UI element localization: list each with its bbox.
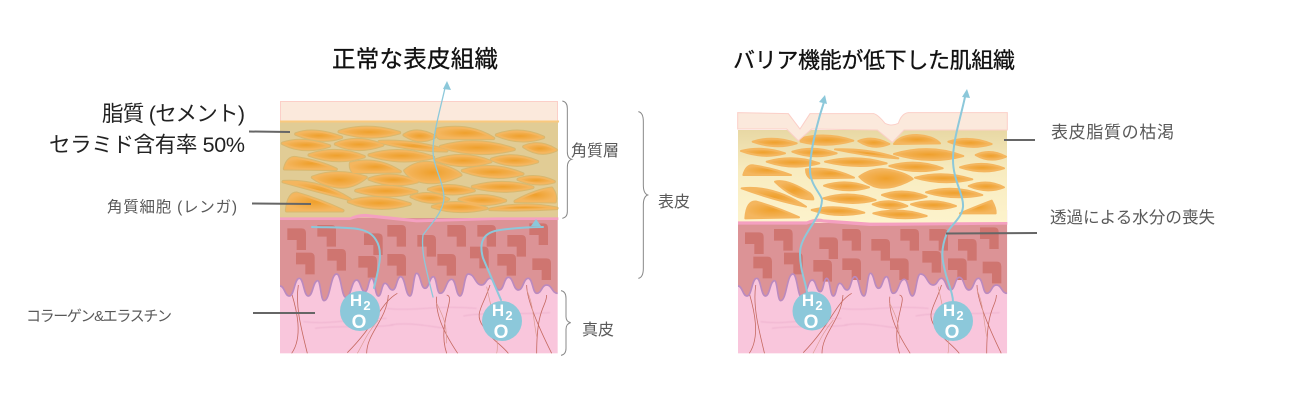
dermis boundary, collagen and vessels xyxy=(280,273,558,353)
brace: dermis: 真皮 xyxy=(582,321,614,339)
icon: H2O molecule 2: O xyxy=(494,322,508,343)
corneocytes (bricks) xyxy=(283,127,557,211)
label: lipid depletion: 表皮脂質の枯渇 xyxy=(1051,123,1174,142)
arrow: water loss, damaged right xyxy=(942,89,970,302)
panel: normal skin cross-section xyxy=(280,102,559,353)
epidermis cell blocks xyxy=(745,227,1001,283)
icon: H2O molecule 3 xyxy=(792,291,832,333)
label: lipid: セラミド含有率 50% xyxy=(49,133,245,157)
icon: H2O molecule 4: O xyxy=(945,322,959,343)
title: damaged barrier: バリア機能が低下した肌組織 xyxy=(733,48,1015,73)
brace: epidermis: 表皮 xyxy=(658,193,690,211)
icon: H2O molecule 3: H xyxy=(802,291,814,310)
icon: H2O molecule 2: H xyxy=(492,301,504,320)
lipid lower edge xyxy=(280,120,559,122)
epidermis cell blocks xyxy=(287,223,551,280)
icon: H2O molecule 4: 2 xyxy=(956,308,964,323)
arrow: water through normal skin, full path xyxy=(422,81,451,297)
icon: H2O molecule 2 xyxy=(482,301,522,343)
corneocytes (bricks, no mortar) xyxy=(741,135,1006,218)
icon: H2O molecule 2: 2 xyxy=(505,308,513,323)
dermis boundary, collagen and vessels xyxy=(738,273,1007,353)
label: water loss: 透過による水分の喪失 xyxy=(1050,208,1216,227)
icon: H2O molecule 3: 2 xyxy=(815,298,823,313)
stratum corneum background xyxy=(280,121,558,218)
brace: stratum corneum: 角質層 xyxy=(571,142,619,160)
label: corneocytes: 角質細胞 (レンガ) xyxy=(107,198,237,216)
panel: damaged skin cross-section xyxy=(738,113,1007,353)
brace: epidermis xyxy=(638,112,690,278)
icon: H2O molecule 1 xyxy=(340,291,380,333)
arrow: water loss, damaged left xyxy=(800,95,827,292)
icon: H2O molecule 4: H xyxy=(943,301,955,320)
cracked lipid layer xyxy=(738,113,1007,142)
brace: dermis xyxy=(561,291,614,355)
label: collagen and elastin: コラーゲン&エラスチン xyxy=(26,308,172,325)
lipid layer xyxy=(280,102,558,121)
dermis and epidermis base xyxy=(738,210,1007,353)
basement pink line xyxy=(280,214,558,222)
icon: H2O molecule 4 xyxy=(933,301,973,343)
label: lipid: 脂質 (セメント) xyxy=(102,102,245,126)
icon: H2O molecule 1: O xyxy=(352,312,366,333)
dry stratum corneum background xyxy=(738,130,1007,223)
title: normal epidermis: 正常な表皮組織 xyxy=(332,46,498,72)
label: lipid xyxy=(49,102,290,157)
brace: stratum corneum xyxy=(562,101,619,218)
arrow: retained water, right xyxy=(481,219,543,300)
icon: H2O molecule 1: H xyxy=(350,291,362,310)
dermis and epidermis base xyxy=(280,210,558,353)
icon: H2O molecule 3: O xyxy=(804,312,818,333)
arrow: retained water, left xyxy=(312,227,380,288)
icon: H2O molecule 1: 2 xyxy=(363,298,371,313)
basement pink line xyxy=(738,219,1007,226)
